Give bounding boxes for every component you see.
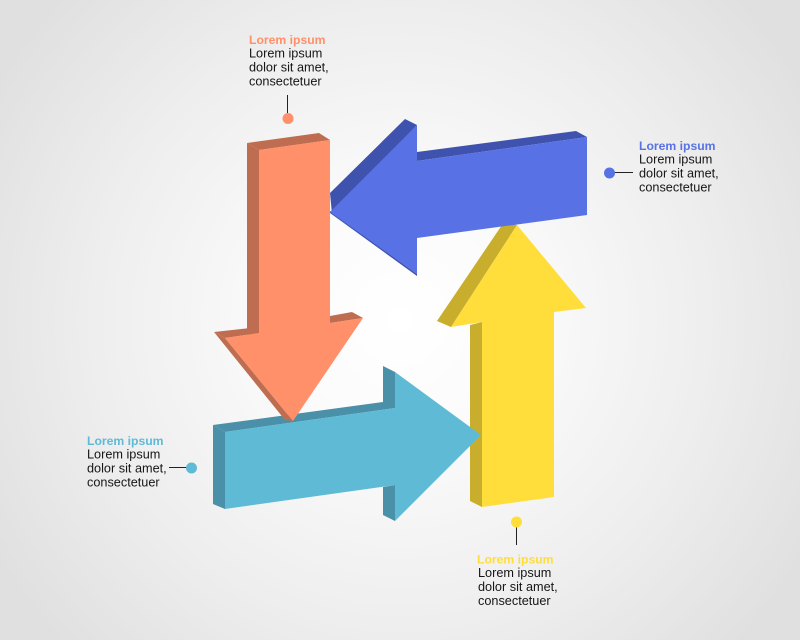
callout: orange <box>249 33 329 124</box>
cyan callout text: consectetuer <box>87 476 160 490</box>
yellow callout text: dolor sit amet, <box>478 580 558 594</box>
orange callout text <box>249 33 329 88</box>
cyan callout text: Lorem ipsum <box>87 434 164 448</box>
arrow: cyan right <box>213 366 481 521</box>
arrow: orange down <box>214 133 363 421</box>
cyan callout text: Lorem ipsum <box>87 448 160 462</box>
orange callout text: dolor sit amet, <box>249 60 329 74</box>
callout: blue <box>604 139 719 194</box>
blue callout text: Lorem ipsum <box>639 139 716 153</box>
arrow: blue left <box>330 119 587 276</box>
yellow callout text <box>477 552 558 608</box>
blue callout text <box>639 139 719 194</box>
yellow callout text: Lorem ipsum <box>477 552 554 566</box>
arrow: yellow up <box>437 222 586 507</box>
cyan callout text: dolor sit amet, <box>87 462 167 476</box>
yellow callout text: Lorem ipsum <box>478 566 551 580</box>
callout: cyan <box>87 434 197 490</box>
yellow callout text: consectetuer <box>478 594 551 608</box>
blue callout text: dolor sit amet, <box>639 166 719 180</box>
orange callout text: Lorem ipsum <box>249 46 322 60</box>
cyan callout text <box>87 434 167 490</box>
orange callout text: consectetuer <box>249 74 322 88</box>
orange callout text: Lorem ipsum <box>249 33 326 47</box>
blue callout text: Lorem ipsum <box>639 152 712 166</box>
callout: yellow <box>477 516 558 608</box>
blue callout text: consectetuer <box>639 180 712 194</box>
